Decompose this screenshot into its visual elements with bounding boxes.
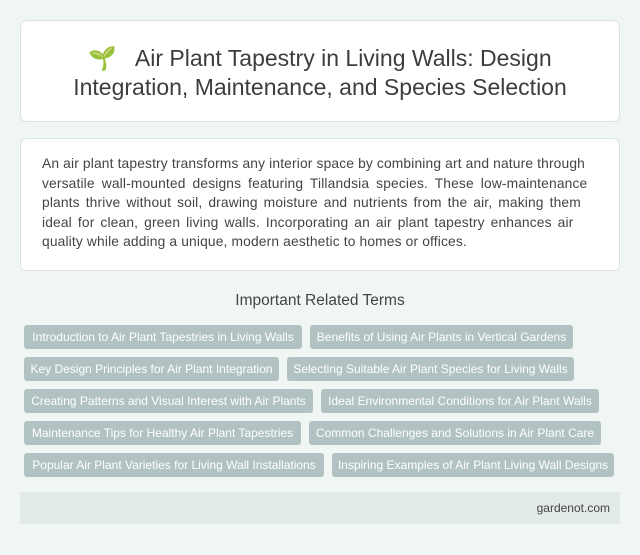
footer source: gardenot.com: [537, 501, 610, 515]
description text: [42, 156, 587, 249]
tags: Key Design Principles for Air Plant Integration: [30, 362, 273, 376]
title: [73, 45, 567, 100]
description text: An air plant tapestry transforms any interior space by combining art and nature through: [42, 156, 585, 171]
section heading: Important Related Terms: [235, 292, 405, 309]
tags: Maintenance Tips for Healthy Air Plant Tapestries: [32, 426, 293, 440]
description text: versatile wall-mounted designs featuring Tillandsia species. These low-maintenance: [42, 176, 587, 190]
tags: Inspiring Examples of Air Plant Living Wall Designs: [338, 458, 608, 472]
tags: Common Challenges and Solutions in Air Plant Care: [316, 426, 594, 440]
description text: quality while adding a unique, modern aesthetic to homes or offices.: [42, 234, 467, 249]
tags: Benefits of Using Air Plants in Vertical Gardens: [317, 330, 566, 344]
description text: plants thrive without soil, drawing moisture and nutrients from the air, making them: [42, 195, 581, 210]
footer: [20, 492, 620, 524]
tags: Introduction to Air Plant Tapestries in Living Walls: [32, 330, 294, 344]
tags: Popular Air Plant Varieties for Living Wall Installations: [32, 458, 316, 472]
tags: Ideal Environmental Conditions for Air Plant Walls: [328, 394, 592, 408]
description panel: [20, 138, 620, 271]
title: 🌱 Air Plant Tapestry in Living Walls: Design: [88, 45, 552, 71]
title: Integration, Maintenance, and Species Selection: [73, 74, 567, 100]
description text: ideal for clean, green living walls. Incorporating an air plant tapestry enhances air: [42, 214, 573, 230]
title panel: [20, 20, 620, 122]
tags: Selecting Suitable Air Plant Species for Living Walls: [293, 362, 568, 376]
tags: Creating Patterns and Visual Interest with Air Plants: [31, 394, 306, 408]
